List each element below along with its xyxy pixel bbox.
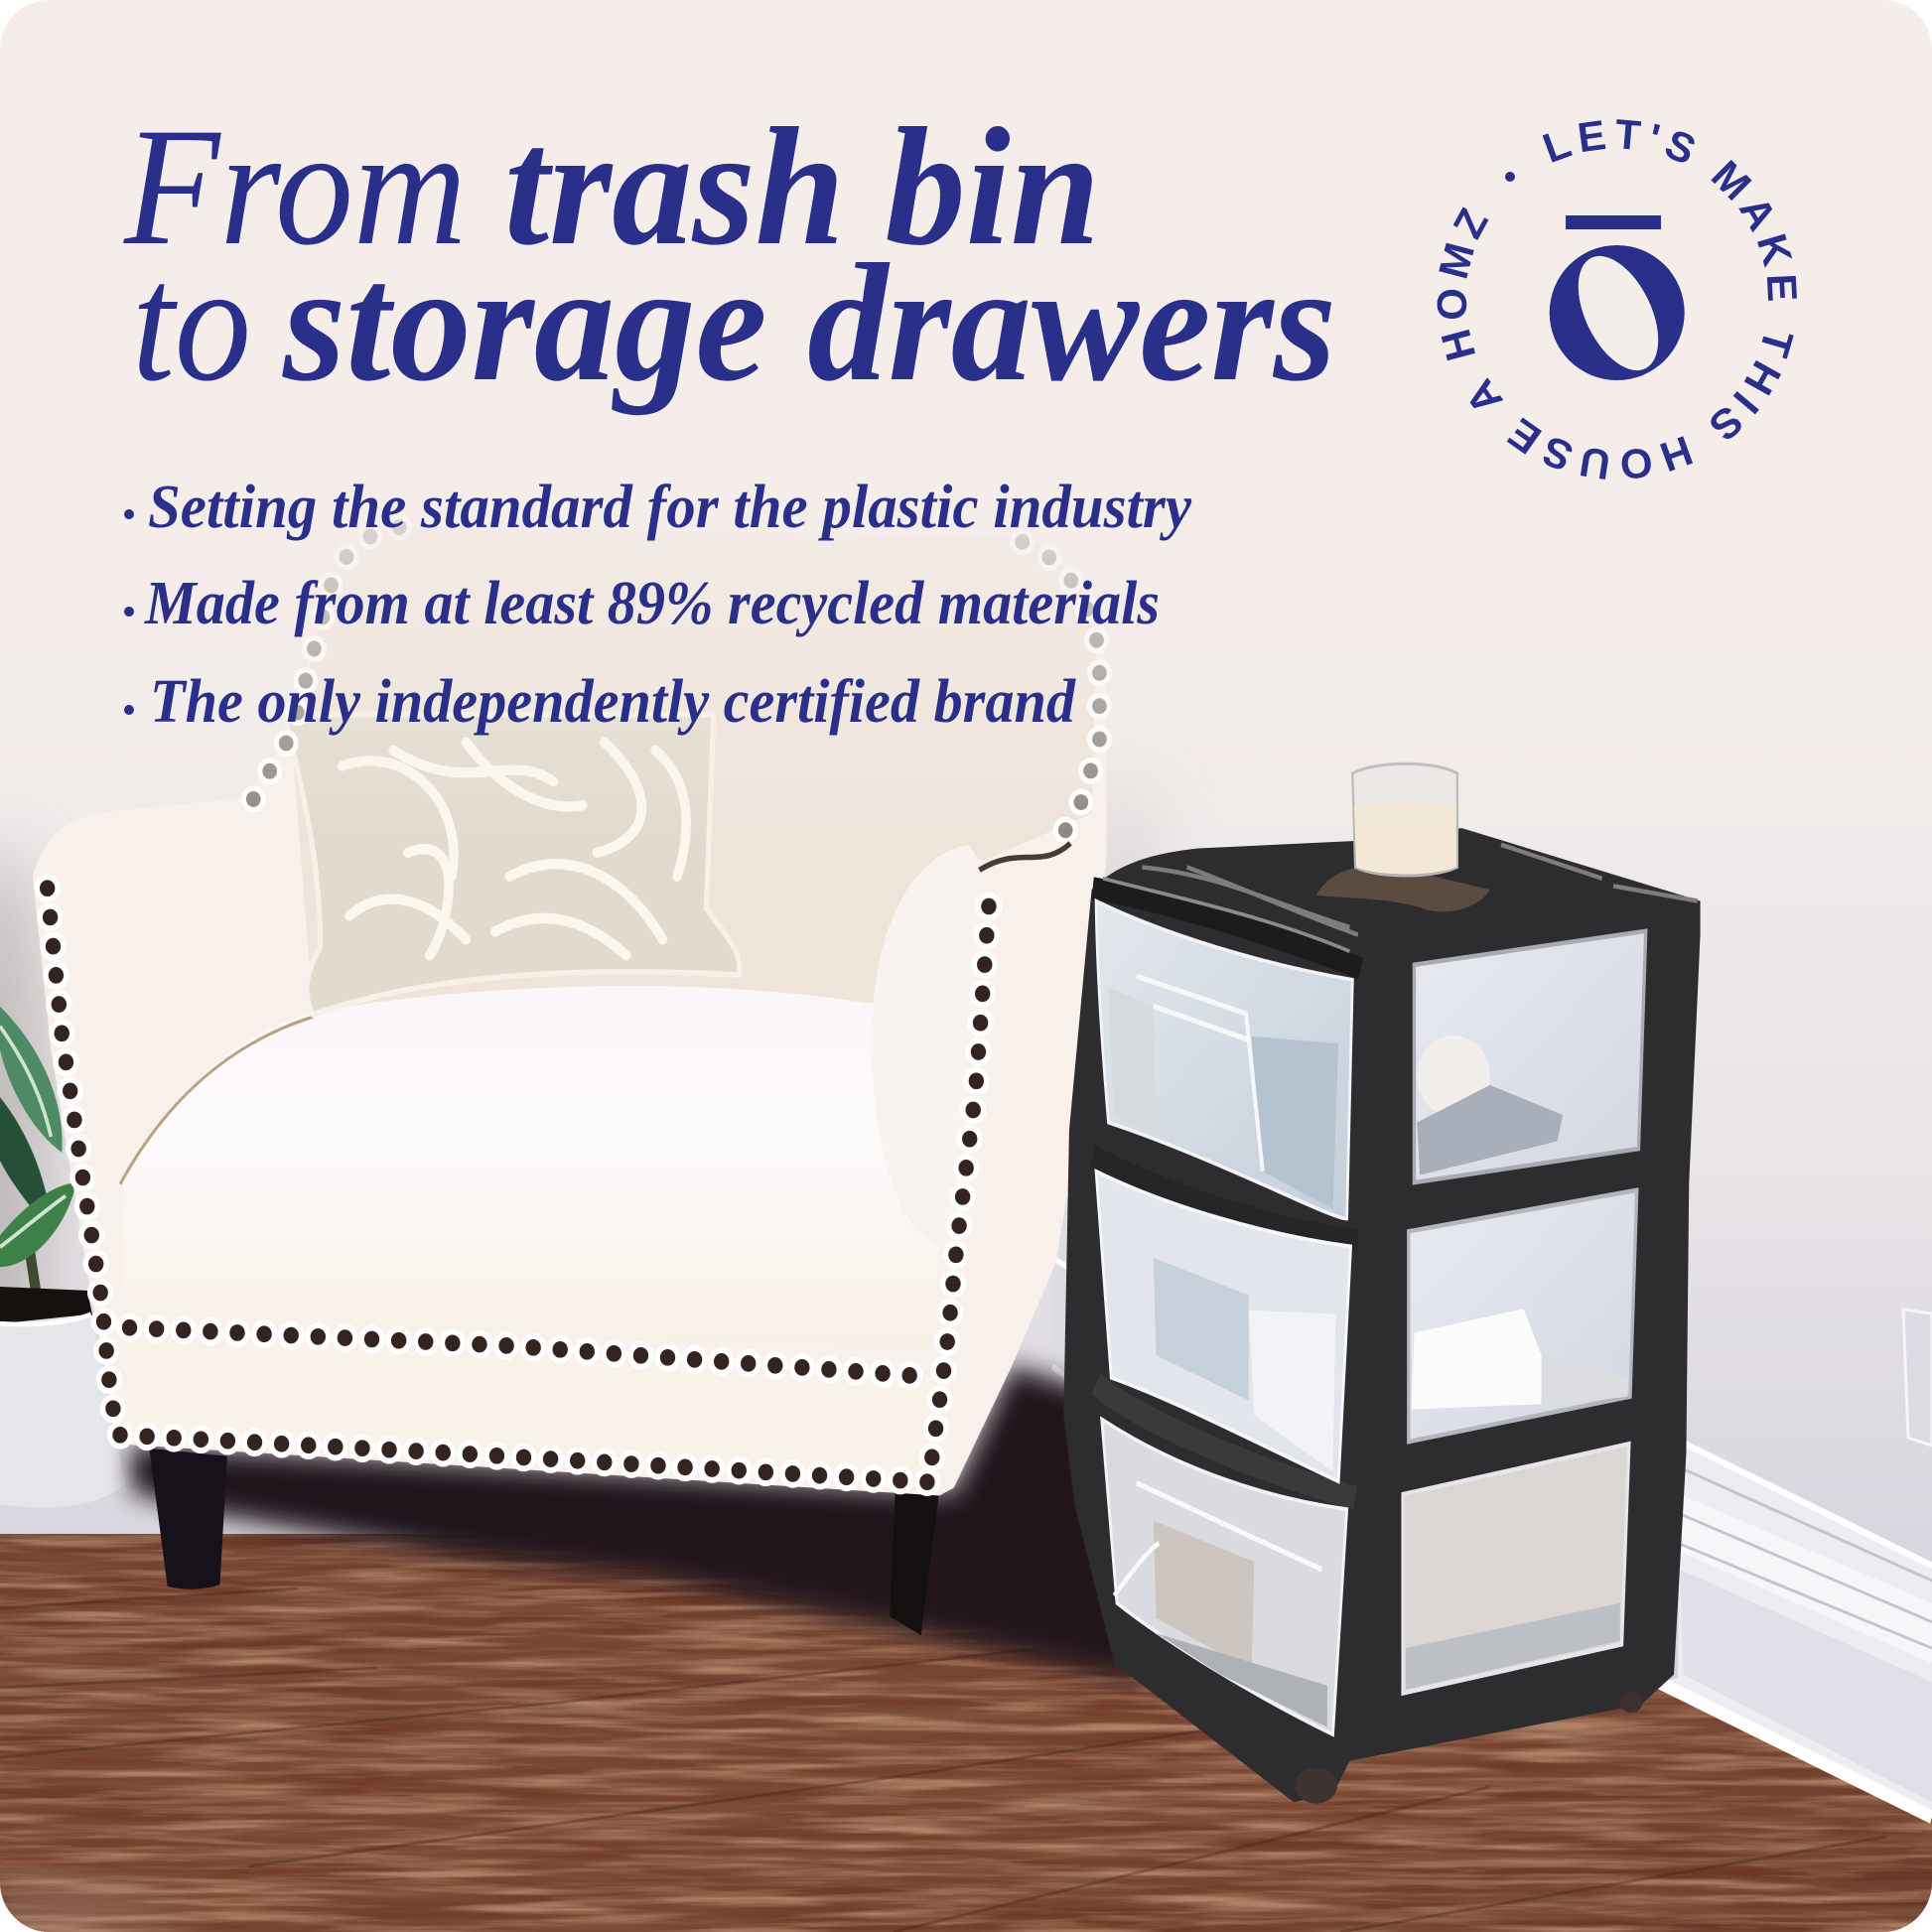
middle side window (1409, 1190, 1637, 1442)
title line 1: From (123, 93, 467, 280)
wall corner line (805, 0, 807, 536)
right arm (874, 845, 979, 1005)
pot (0, 1287, 125, 1507)
front rail (122, 1338, 939, 1476)
wall (0, 576, 1932, 1928)
chair legs (149, 1449, 939, 1635)
storage drawers (1063, 763, 1701, 1804)
armchair (33, 526, 1136, 1681)
bottom left drawer (1102, 1419, 1347, 1734)
pillow (284, 715, 740, 1015)
chair body (33, 756, 1107, 1495)
shadow beside chair (1104, 803, 1161, 878)
background room scene (0, 522, 1932, 1932)
nailhead studs (48, 889, 989, 1482)
candle coaster (1316, 866, 1490, 911)
left wall shading (0, 844, 45, 1440)
bullet list (124, 474, 1191, 736)
arm notch (979, 843, 1070, 870)
casters (1295, 1692, 1642, 1804)
slogan dot (1505, 172, 1515, 182)
bottom side window towel (1403, 1444, 1629, 1694)
seat seam (120, 1017, 313, 1184)
wood floor (0, 1534, 1932, 1932)
drawer unit frame (1063, 828, 1701, 1802)
shadow under chair (131, 1365, 1136, 1681)
top tray highlights (1142, 845, 1698, 935)
title line 2: storage drawers (282, 229, 1336, 416)
faded back studs (253, 526, 1099, 849)
bullet 3: The only independently certified brand (150, 668, 1076, 736)
drawer lips (1093, 879, 1361, 1498)
top left drawer (1096, 900, 1352, 1218)
tilted o mark (1550, 243, 1685, 383)
title line 1: trash bin (504, 93, 1100, 280)
circular slogan: LET'S MAKE THIS HOUSE A HOMZ (1438, 119, 1797, 480)
middle left drawer (1096, 1172, 1351, 1481)
plant leaves (0, 1007, 74, 1289)
brand logo badge (1438, 119, 1797, 480)
electrical outlet (1903, 1310, 1932, 1446)
top side window (1414, 931, 1646, 1182)
title line 1 (123, 93, 1100, 280)
potted plant (0, 1007, 125, 1507)
top fade overlay (0, 0, 1932, 834)
bullet 1: Setting the standard for the plastic industry (148, 474, 1191, 541)
baseboard (1052, 1190, 1932, 1817)
seat cushion (124, 986, 908, 1221)
macron bar (1566, 215, 1661, 229)
bullet 2: Made from at least 89% recycled materials (144, 570, 1160, 637)
title line 2: to (132, 229, 251, 416)
candle (1352, 763, 1457, 876)
title (123, 93, 1336, 416)
chair back (294, 614, 1096, 1006)
